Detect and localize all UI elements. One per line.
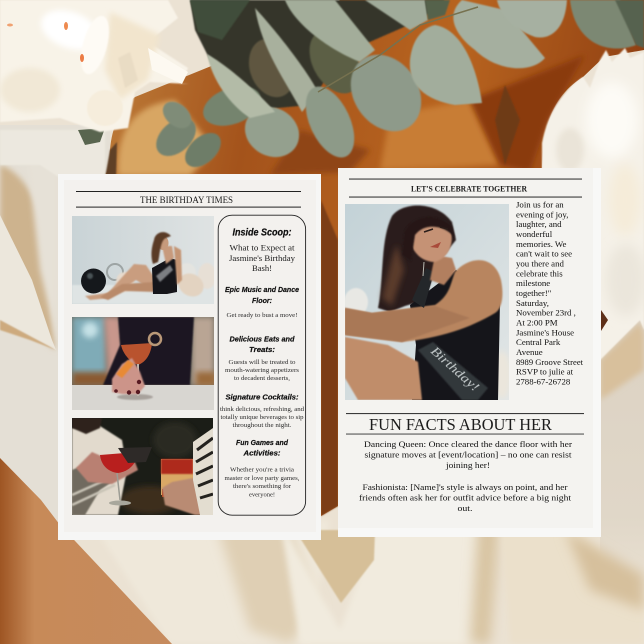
item: Delicious Eats and Treats: Guests will be treated to — [228, 359, 296, 366]
text block: invitation details: evening of joy, — [516, 209, 568, 219]
item: Signature Cocktails: Signature Cocktails: — [226, 393, 299, 402]
photo: woman with balloons — [72, 216, 216, 304]
item: Fun Games and Activities: Activities: — [242, 449, 281, 458]
text block: invitation details: you there and — [516, 258, 564, 268]
intro text: Bash! — [252, 263, 272, 273]
item: Signature Cocktails: think delicious, refreshing, and — [220, 406, 305, 413]
sash — [418, 342, 488, 400]
item: Signature Cocktails: throughout the night. — [232, 422, 292, 429]
text block: invitation details — [516, 200, 584, 386]
intro text — [229, 244, 295, 271]
item: Fun Games and Activities — [224, 438, 300, 498]
item: Fun Games and Activities: master or love party games, — [224, 475, 300, 482]
intro text: Jasmine's Birthday — [229, 253, 296, 263]
wood board — [104, 0, 644, 516]
text block: invitation details: Central Park — [516, 337, 561, 347]
heading: Fun Facts About Her: FUN FACTS ABOUT HER — [369, 415, 552, 434]
text block: fun facts: Dancing Queen: Once cleared the dance floor with her — [364, 439, 572, 449]
left flower — [0, 0, 189, 132]
photo: woman in birthday sash: Birthday! — [428, 343, 483, 394]
intro text: What to Expect at — [230, 243, 295, 253]
photo: woman in birthday sash — [344, 204, 511, 400]
neck — [430, 255, 456, 285]
text block: invitation details: milestone — [516, 278, 550, 288]
face — [412, 226, 453, 263]
orange fabric corner — [0, 458, 172, 644]
text block: invitation details: Join us for an — [516, 200, 564, 210]
dress — [410, 270, 500, 400]
hair — [378, 205, 456, 312]
text block: invitation details: celebrate this — [516, 268, 563, 278]
text block: invitation details: November 23rd , — [516, 308, 576, 318]
item: Delicious Eats and Treats: Delicious Eats and — [230, 335, 295, 344]
item: Epic Music and Dance Floor: Get ready to bust a move! — [226, 312, 298, 319]
eucalyptus leaves — [78, 0, 644, 174]
item: Delicious Eats and Treats — [225, 335, 299, 382]
photo: hand holding cocktail glass — [72, 317, 216, 410]
panel: Inside Scoop: Inside Scoop: — [232, 228, 292, 239]
item: Fun Games and Activities: Whether you're a trivia — [230, 466, 294, 473]
text block: invitation details: Saturday, — [516, 298, 549, 308]
text block: fun facts: out. — [458, 503, 472, 513]
item: Delicious Eats and Treats: to decadent desserts, — [234, 375, 290, 382]
dark foliage shadow — [190, 0, 445, 110]
arm — [345, 260, 502, 342]
item: Fun Games and Activities: everyone! — [249, 492, 275, 498]
text block: fun facts: Fashionista: [Name]'s style is always on point, and her — [362, 482, 568, 492]
card: Let's Celebrate Together — [338, 168, 601, 537]
text block: fun facts — [359, 439, 572, 513]
text block: invitation details: RSVP to julie at — [516, 367, 574, 377]
text block: invitation details: laughter, and — [516, 219, 562, 229]
item: Signature Cocktails — [220, 393, 305, 429]
text block: invitation details: At 2:00 PM — [516, 318, 558, 328]
text block: invitation details: memories. We — [516, 239, 567, 249]
item: Fun Games and Activities: there's something for — [233, 483, 292, 490]
text block: invitation details: Avenue — [516, 347, 543, 357]
text block: fun facts: joining her! — [445, 460, 490, 470]
text block: invitation details: Jasmine's House — [516, 327, 574, 337]
text block: invitation details: 8989 Groove Street — [516, 357, 584, 367]
item: Fun Games and Activities: Fun Games and — [236, 438, 288, 447]
header: Let's Celebrate Together: LET'S CELEBRATE TOGETHER — [411, 184, 528, 194]
item: Delicious Eats and Treats: Treats: — [249, 345, 275, 354]
header: The Birthday Times: THE BIRTHDAY TIMES — [140, 196, 233, 206]
panel: Inside Scoop — [218, 215, 306, 515]
item: Epic Music and Dance Floor — [225, 285, 300, 319]
text block: fun facts: signature moves at [event/location] – no one can resist — [364, 450, 572, 460]
card: The Birthday Times — [58, 174, 321, 540]
text block: invitation details: can't wait to see — [516, 249, 572, 259]
text block: fun facts: friends often ask her for outfit advice before a big night — [359, 492, 572, 502]
item: Epic Music and Dance Floor: Epic Music and Dance — [225, 285, 300, 294]
item: Delicious Eats and Treats: mouth-watering appetizers — [225, 367, 299, 374]
text block: invitation details: 2788-67-26728 — [516, 376, 571, 386]
text block: invitation details: wonderful — [516, 229, 553, 239]
item: Epic Music and Dance Floor: Floor: — [252, 296, 272, 305]
item: Signature Cocktails: totally unique beverages to sip — [220, 414, 304, 421]
leg — [345, 337, 422, 400]
text block: invitation details: together!" — [516, 288, 552, 298]
right flower — [542, 48, 644, 360]
photo: friends toasting drinks — [72, 418, 213, 515]
